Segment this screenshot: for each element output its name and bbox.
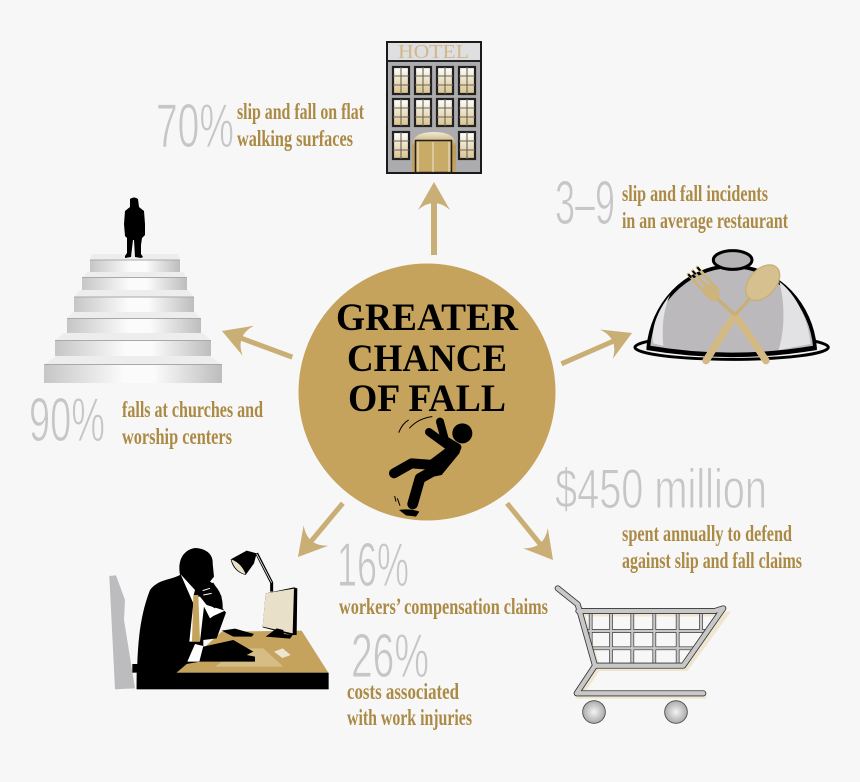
stat: 26% work injuries: 26%	[351, 622, 429, 691]
arrow: lower left to office	[286, 493, 355, 567]
fork head	[688, 267, 717, 295]
heading: CHANCE	[347, 337, 507, 380]
stat: 70% flat walking surfaces: walking surfaces	[237, 126, 353, 151]
stat: 90% churches: 90%	[29, 386, 105, 455]
note	[274, 648, 291, 658]
center circle: greater chance of fall	[298, 264, 556, 520]
icon: office worker at desk	[109, 548, 329, 689]
arrow: left to stairs	[216, 316, 298, 372]
keyboard	[222, 629, 254, 637]
stat: 90% churches	[29, 386, 263, 455]
shirt	[181, 574, 225, 642]
stat: 90% churches: falls at churches and	[122, 397, 263, 422]
stat: 26% work injuries: with work injuries	[347, 705, 472, 730]
stat: $450 million	[555, 457, 802, 573]
heading	[336, 296, 519, 420]
icon: falling person	[394, 417, 472, 517]
desk	[177, 631, 328, 673]
heading: OF FALL	[348, 377, 506, 420]
heading: GREATER	[336, 296, 519, 339]
icon: hotel	[387, 41, 481, 173]
stat: $450 million: $450 million	[555, 457, 767, 520]
cutlery handles	[706, 315, 766, 361]
arrow: lower right to cart	[495, 493, 565, 570]
stat: 90% churches: worship centers	[122, 424, 232, 449]
arrow: up to hotel	[418, 182, 450, 255]
cart grid	[584, 612, 707, 666]
icon: serving cloche with fork and spoon	[635, 251, 828, 361]
stat: $450 million: spent annually to defend	[622, 521, 792, 546]
stat: 70% flat walking surfaces	[156, 92, 364, 161]
icon: shopping cart	[558, 588, 726, 723]
monitor	[263, 587, 297, 635]
arrow: right to restaurant	[555, 318, 638, 378]
stat: 16% workers' compensation	[337, 531, 548, 619]
spoon bowl	[739, 258, 786, 307]
icon: stairs with man	[44, 198, 222, 383]
stat: 26% work injuries	[347, 622, 472, 730]
lamp	[257, 553, 272, 592]
stat: 26% work injuries: costs associated	[347, 679, 459, 704]
stat: 16% workers' compensation: workers’ compensation claims	[339, 594, 548, 619]
stat: 3-9 restaurant incidents	[555, 169, 788, 238]
stat: 70% flat walking surfaces: 70%	[156, 92, 234, 161]
stat: 3-9 restaurant incidents: 3–9	[555, 169, 615, 238]
stat: 16% workers' compensation: 16%	[337, 531, 409, 600]
hotel sign: HOTEL	[398, 41, 469, 63]
man silhouette	[124, 198, 145, 258]
chair	[109, 575, 135, 689]
stat: 3-9 restaurant incidents: in an average restaurant	[622, 208, 788, 233]
man	[137, 548, 255, 689]
stat: 3-9 restaurant incidents: slip and fall incidents	[622, 181, 768, 206]
stat: 70% flat walking surfaces: slip and fall on flat	[237, 99, 364, 124]
